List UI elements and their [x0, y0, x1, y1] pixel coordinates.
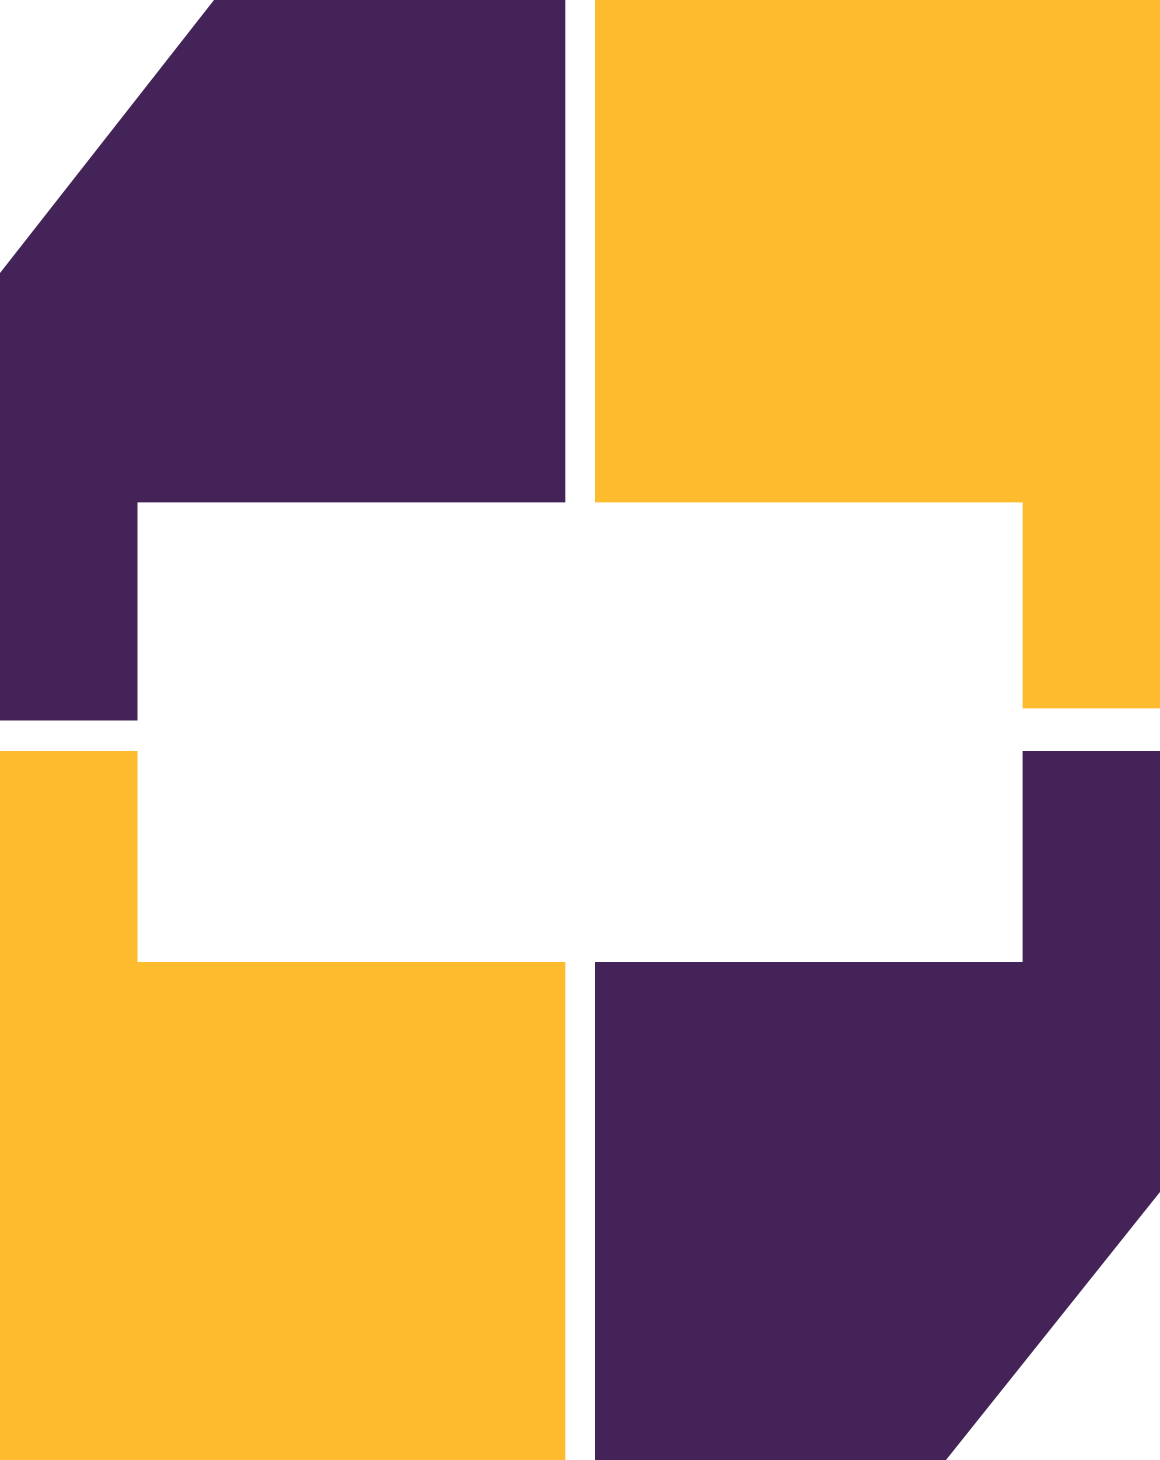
panel: bottom-right purple: [595, 751, 1160, 1460]
panel: top-right yellow: [595, 0, 1160, 708]
panel: bottom-left yellow: [0, 751, 565, 1460]
panel: top-left purple: [0, 0, 565, 720]
